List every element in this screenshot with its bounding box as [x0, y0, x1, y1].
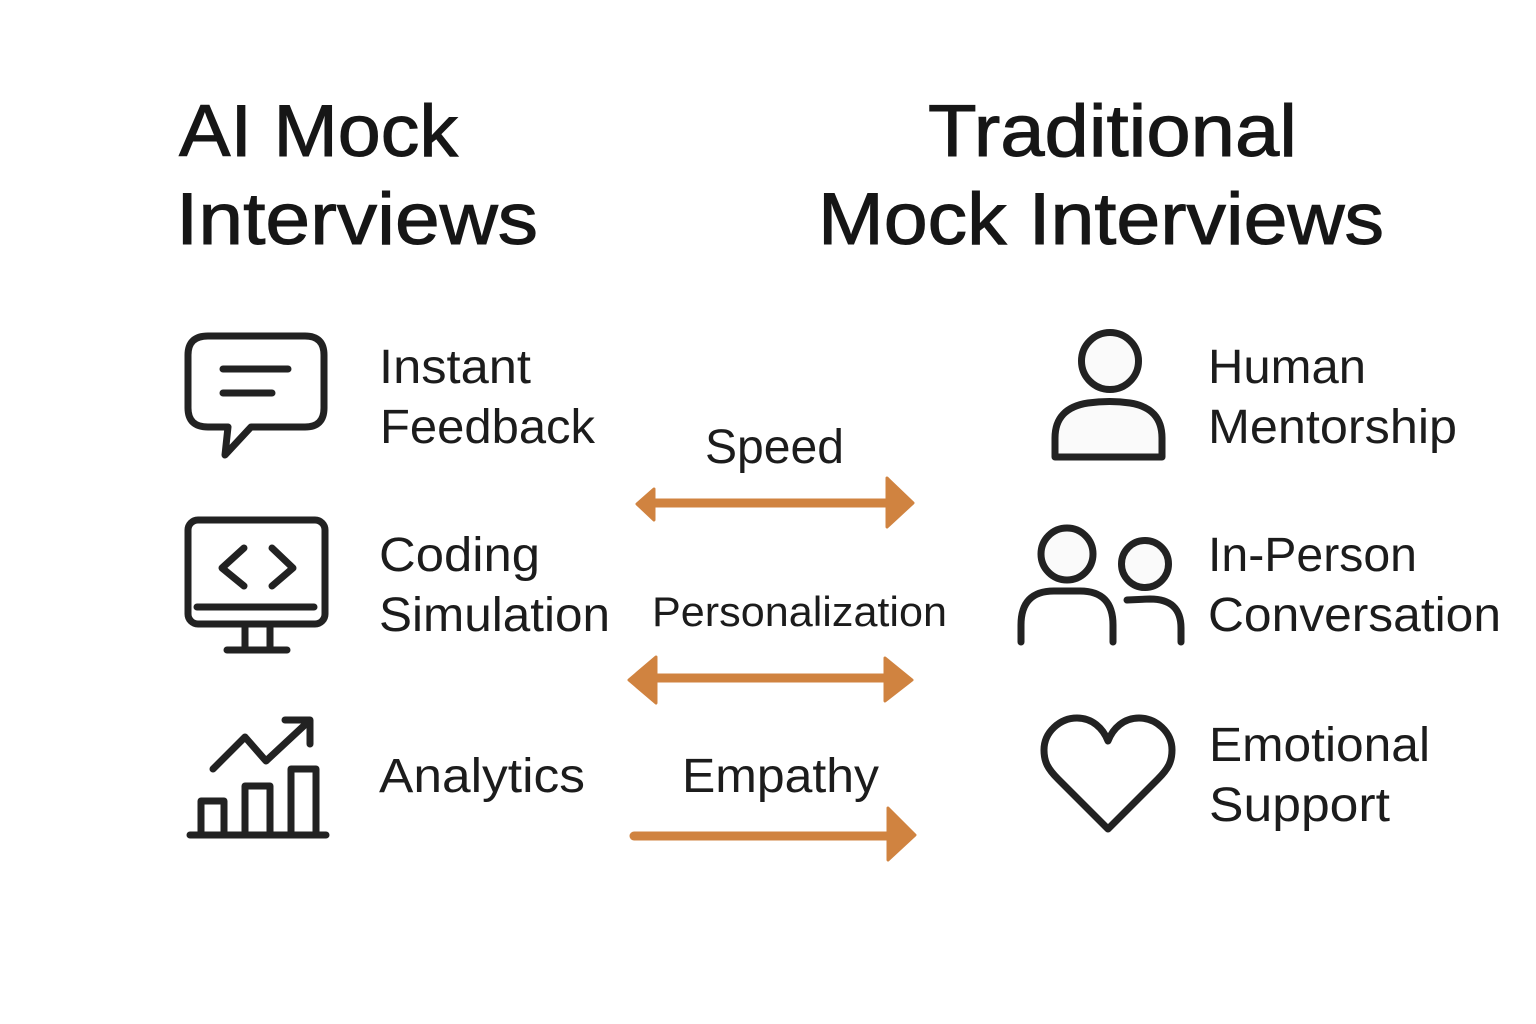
label: Instant Feedback	[379, 341, 596, 454]
arrow: Personalization	[629, 657, 912, 703]
label: Coding Simulation	[379, 529, 610, 642]
label: Personalization: Personalization	[652, 588, 947, 635]
heading: Traditional Mock Interviews	[818, 91, 1384, 260]
label: Empathy: Empathy	[682, 750, 879, 803]
arrow: Empathy	[634, 808, 915, 860]
heading: AI Mock Interviews	[176, 91, 538, 260]
heading: AI Mock Interviews: AI Mock	[179, 91, 459, 172]
heading: Traditional Mock Interviews: Traditional	[928, 91, 1297, 172]
icon: person	[1055, 332, 1162, 457]
heading: Traditional Mock Interviews: Mock Interviews	[818, 179, 1384, 260]
label: Coding Simulation: Simulation	[379, 589, 610, 642]
arrow: Speed	[637, 478, 913, 527]
label: Speed: Speed	[705, 421, 844, 474]
label: In-Person Conversation	[1208, 529, 1501, 642]
label: Emotional Support: Support	[1209, 779, 1390, 832]
label: Coding Simulation: Coding	[379, 529, 540, 582]
icon: code monitor	[188, 520, 325, 650]
label: Instant Feedback: Feedback	[380, 401, 596, 454]
label: Human Mentorship: Human	[1208, 341, 1366, 394]
label: In-Person Conversation: In-Person	[1208, 529, 1417, 582]
label: Human Mentorship	[1208, 341, 1457, 454]
icon: two people	[1021, 528, 1181, 642]
heading: AI Mock Interviews: Interviews	[176, 179, 538, 260]
label: Instant Feedback: Instant	[379, 341, 531, 394]
icon: analytics chart	[190, 720, 326, 835]
label: Emotional Support: Emotional	[1209, 719, 1430, 772]
label: Analytics: Analytics	[379, 750, 585, 803]
label: In-Person Conversation: Conversation	[1208, 589, 1501, 642]
icon: chat bubble	[188, 336, 324, 455]
label: Human Mentorship: Mentorship	[1208, 401, 1457, 454]
label: Emotional Support	[1209, 719, 1430, 832]
icon: heart	[1044, 718, 1172, 829]
